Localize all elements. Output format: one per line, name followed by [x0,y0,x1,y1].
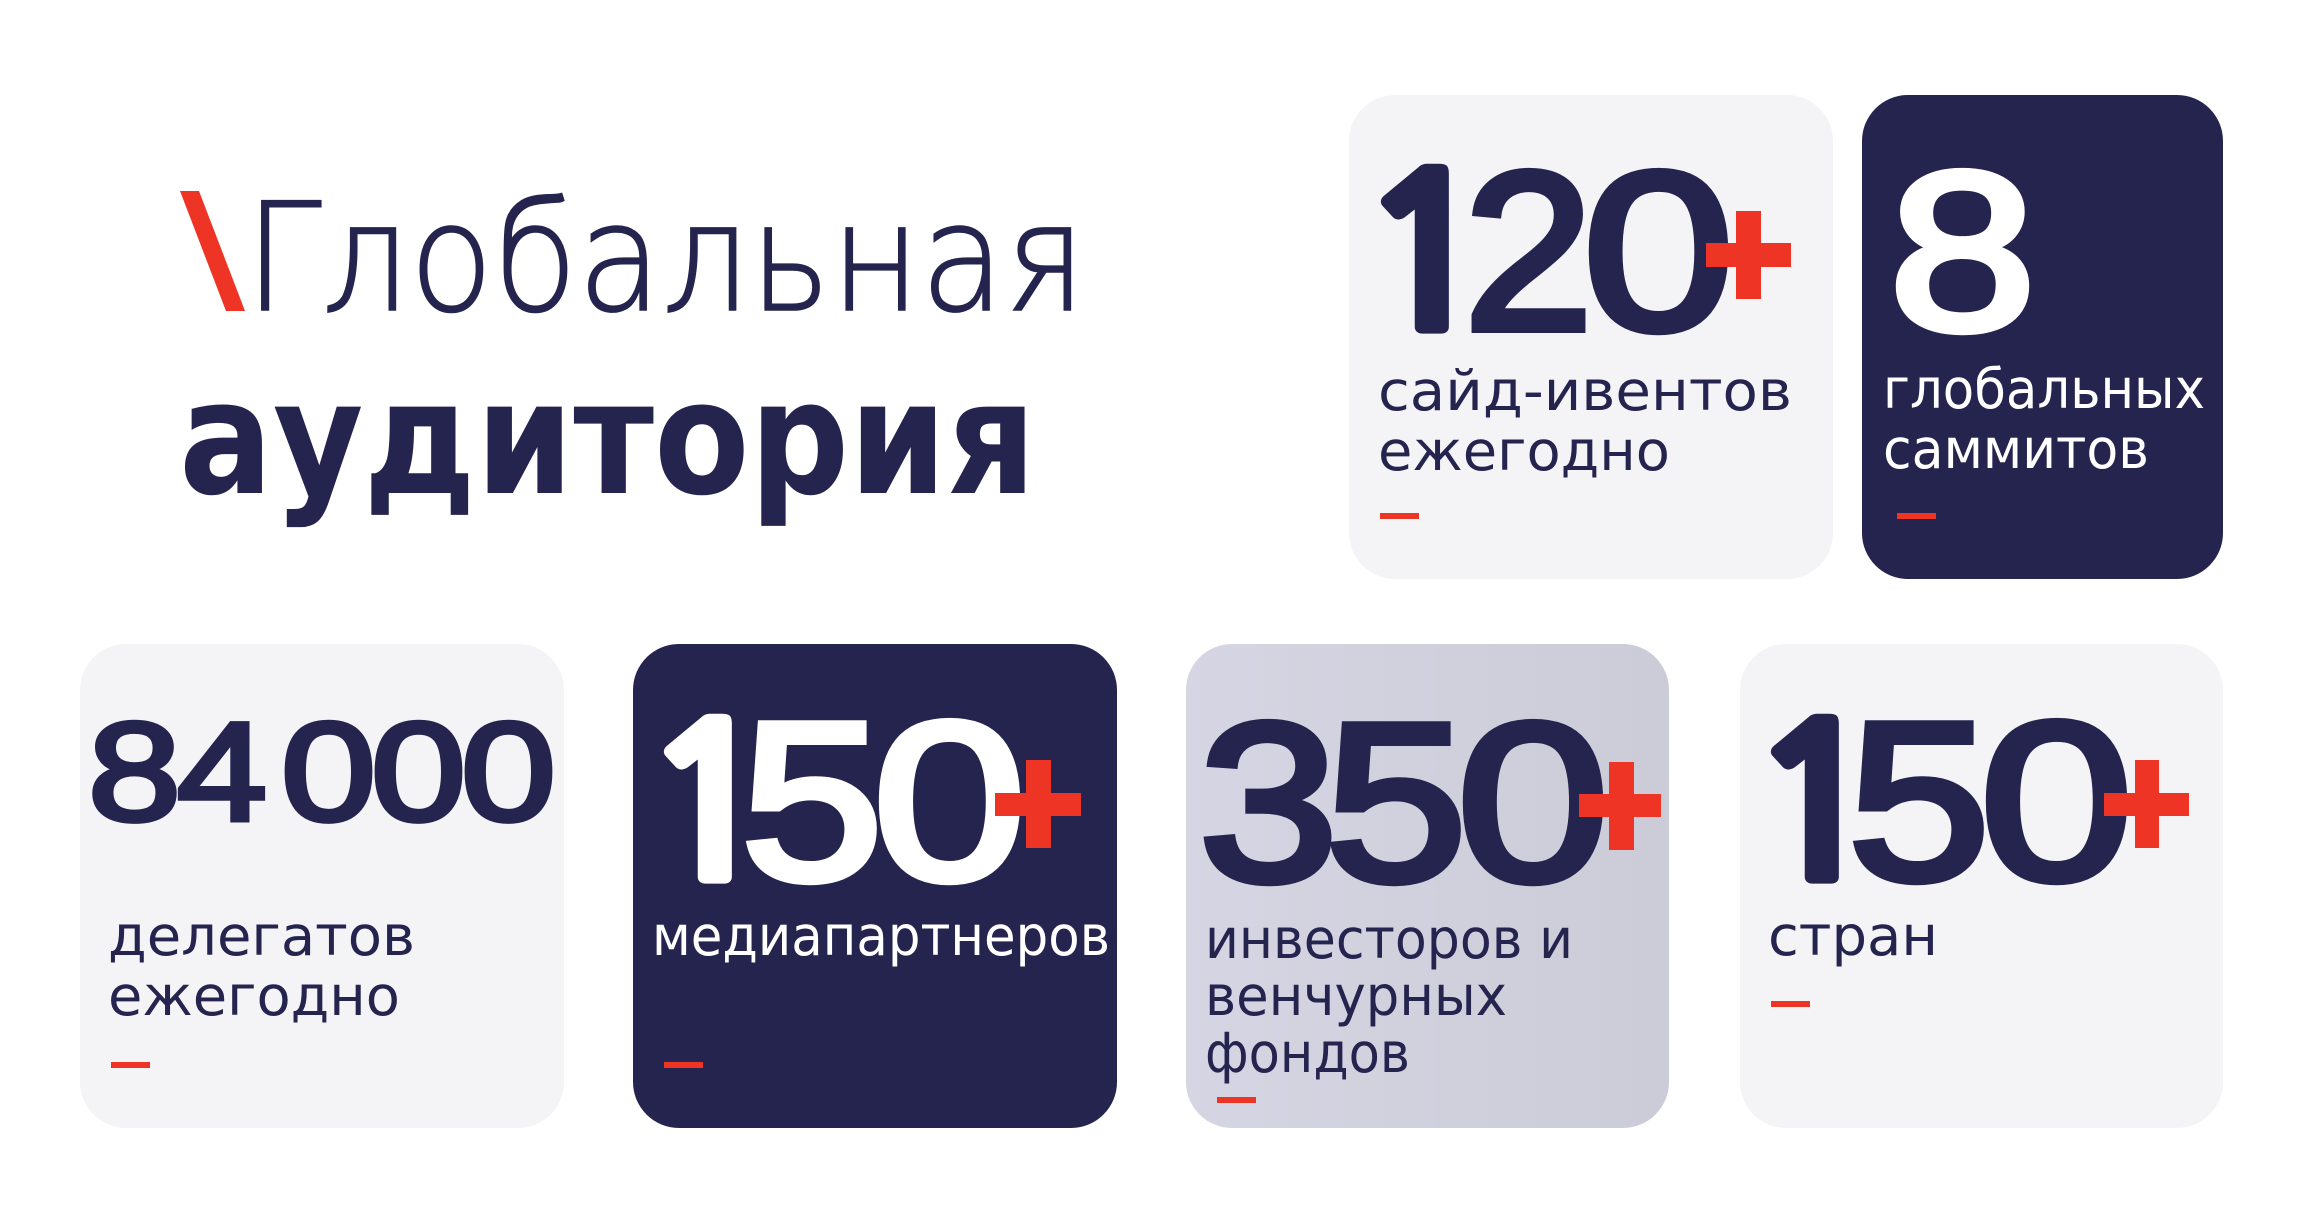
panel: side events [1349,95,1833,579]
number: 120+: 1 [1355,150,1498,361]
label: media partners: медиапартнеров [652,904,1110,968]
number: 8: 8 [1889,125,2036,377]
panel: investors and venture funds [1186,644,1669,1128]
accent dash [664,1062,703,1068]
number: 120+: 0 [1583,125,1734,377]
number: 84 000: 0 [281,693,376,850]
accent dash [1380,513,1419,519]
panel: countries [1740,644,2223,1128]
panel: media partners [633,644,1117,1128]
heading: Глобальная: Глобальная [245,172,1086,346]
number: 84 000: 0 [461,693,556,850]
panel: global summits [1862,95,2223,579]
label: side events: ежегодно [1378,419,1670,483]
label: global summits: глобальных [1883,357,2205,421]
number: 150+: 1 [638,700,781,911]
icon: plus [995,760,1081,848]
number: 84 000: 4 [177,693,267,850]
icon: plus [1706,211,1791,299]
accent dash [1897,513,1936,519]
number: 120+: 2 [1464,125,1593,377]
number: 350+: 3 [1199,676,1338,928]
heading: аудитория: аудитория [179,347,1036,531]
number: 150+: 5 [741,675,883,927]
number: 84 000: 8 [88,693,181,850]
label: delegates: ежегодно [108,964,400,1028]
title [179,172,1086,531]
number: 350+: 5 [1325,676,1467,928]
label: investors and venture funds: фондов [1205,1021,1410,1085]
icon: red slash [180,191,245,311]
panel: delegates [80,644,564,1128]
label: investors and venture funds: венчурных [1205,964,1507,1028]
number: 84 000: 0 [371,693,466,850]
icon: plus [2104,760,2189,848]
number: 150+: 0 [873,675,1026,927]
label: global summits: саммитов [1883,417,2149,481]
label: delegates: делегатов [108,904,415,968]
icon: plus [1579,762,1661,850]
number: 350+: 0 [1457,676,1609,928]
label: side events: сайд-ивентов [1378,359,1792,423]
number: 150+: 5 [1848,675,1990,927]
accent dash [111,1062,150,1068]
accent dash [1771,1001,1810,1007]
accent dash [1217,1097,1256,1103]
number: 150+: 1 [1745,700,1888,911]
label: investors and venture funds: инвесторов и [1205,907,1573,971]
number: 150+: 0 [1980,675,2133,927]
label: countries: стран [1768,904,1938,968]
